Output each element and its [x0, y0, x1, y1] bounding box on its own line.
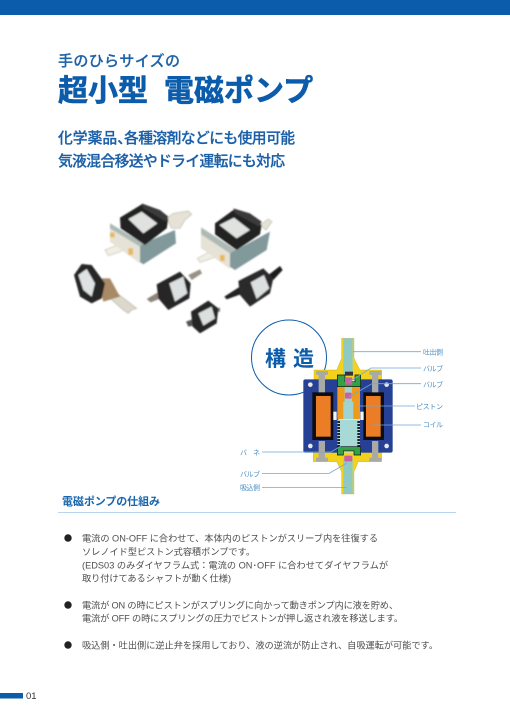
pump: black port	[224, 266, 283, 307]
title block	[58, 52, 313, 108]
page number: 01	[26, 691, 37, 702]
pump: small black metal port	[147, 269, 202, 310]
main heading: 電磁ポンプ	[164, 75, 313, 108]
spring chamber	[337, 420, 360, 448]
lower valve	[337, 447, 361, 461]
kicker heading: 手のひらサイズの	[58, 52, 180, 70]
label: discharge side: 吐出側	[423, 348, 443, 356]
label: piston: ピストン	[416, 403, 443, 411]
bullet item 3: 吸込側・吐出側に逆止弁を採用しており、液の逆流が防止され、自吸運転が可能です。	[82, 639, 438, 650]
bullet item 1: (EDS03 のみダイヤフラム式：電流の ON･OFF に合わせてダイヤフラムが	[82, 559, 388, 570]
label: valve upper: バルブ	[423, 364, 443, 373]
pump cross-section diagram	[303, 338, 393, 494]
subheading: 化学薬品、	[58, 130, 132, 147]
pump: large white ports right	[197, 208, 272, 270]
top banner bar	[0, 0, 510, 15]
bullet item 2	[64, 599, 403, 624]
label: valve middle: バルブ	[423, 380, 443, 389]
label: spring: バ ネ	[240, 449, 260, 457]
leader lines	[262, 352, 421, 488]
main heading: 超小型	[58, 75, 148, 108]
subheading: 各種溶剤などにも使用可能	[124, 129, 295, 147]
label: valve lower: バルブ	[240, 470, 260, 478]
bullet list	[64, 532, 438, 650]
bullet item 1: 電流の ON-OFF に合わせて、本体内のピストンがスリーブ内を往復する	[82, 532, 378, 543]
yellow housing	[314, 338, 382, 380]
product photos: pump group	[74, 203, 283, 333]
pump: smallest	[186, 301, 220, 333]
pump: diaphragm type	[74, 264, 137, 313]
bullet item 2: 電流が ON の時にピストンがスプリングに向かって動きポンプ内に液を貯め、	[82, 599, 398, 610]
section divider	[58, 512, 456, 513]
footer page marker	[0, 693, 23, 698]
right coil block	[360, 379, 393, 453]
pump: large white ports left	[105, 203, 192, 264]
section heading: 電磁ポンプの仕組み	[62, 494, 160, 508]
subheading: 気液混合移送やドライ運転にも対応	[58, 153, 285, 170]
tube bore	[343, 338, 353, 375]
left coil block	[303, 379, 338, 453]
label: suction side: 吸込側	[240, 483, 260, 492]
bullet item 2: 電流が OFF の時にスプリングの圧力でピストンが押し返され液を移送します。	[82, 613, 403, 624]
badge label: 構	[265, 348, 286, 371]
badge label: 造	[293, 348, 314, 371]
piston	[333, 387, 364, 420]
screws	[316, 371, 381, 462]
label: coil: コイル	[423, 421, 443, 429]
subheading	[58, 129, 295, 170]
upper valve	[337, 372, 361, 399]
bullet item 1	[64, 532, 388, 584]
bullet item 1: ソレノイド型ピストン式容積ポンプです。	[82, 546, 255, 557]
bullet item 1: 取り付けてあるシャフトが動く仕様)	[82, 573, 231, 584]
structure badge circle	[252, 320, 326, 395]
